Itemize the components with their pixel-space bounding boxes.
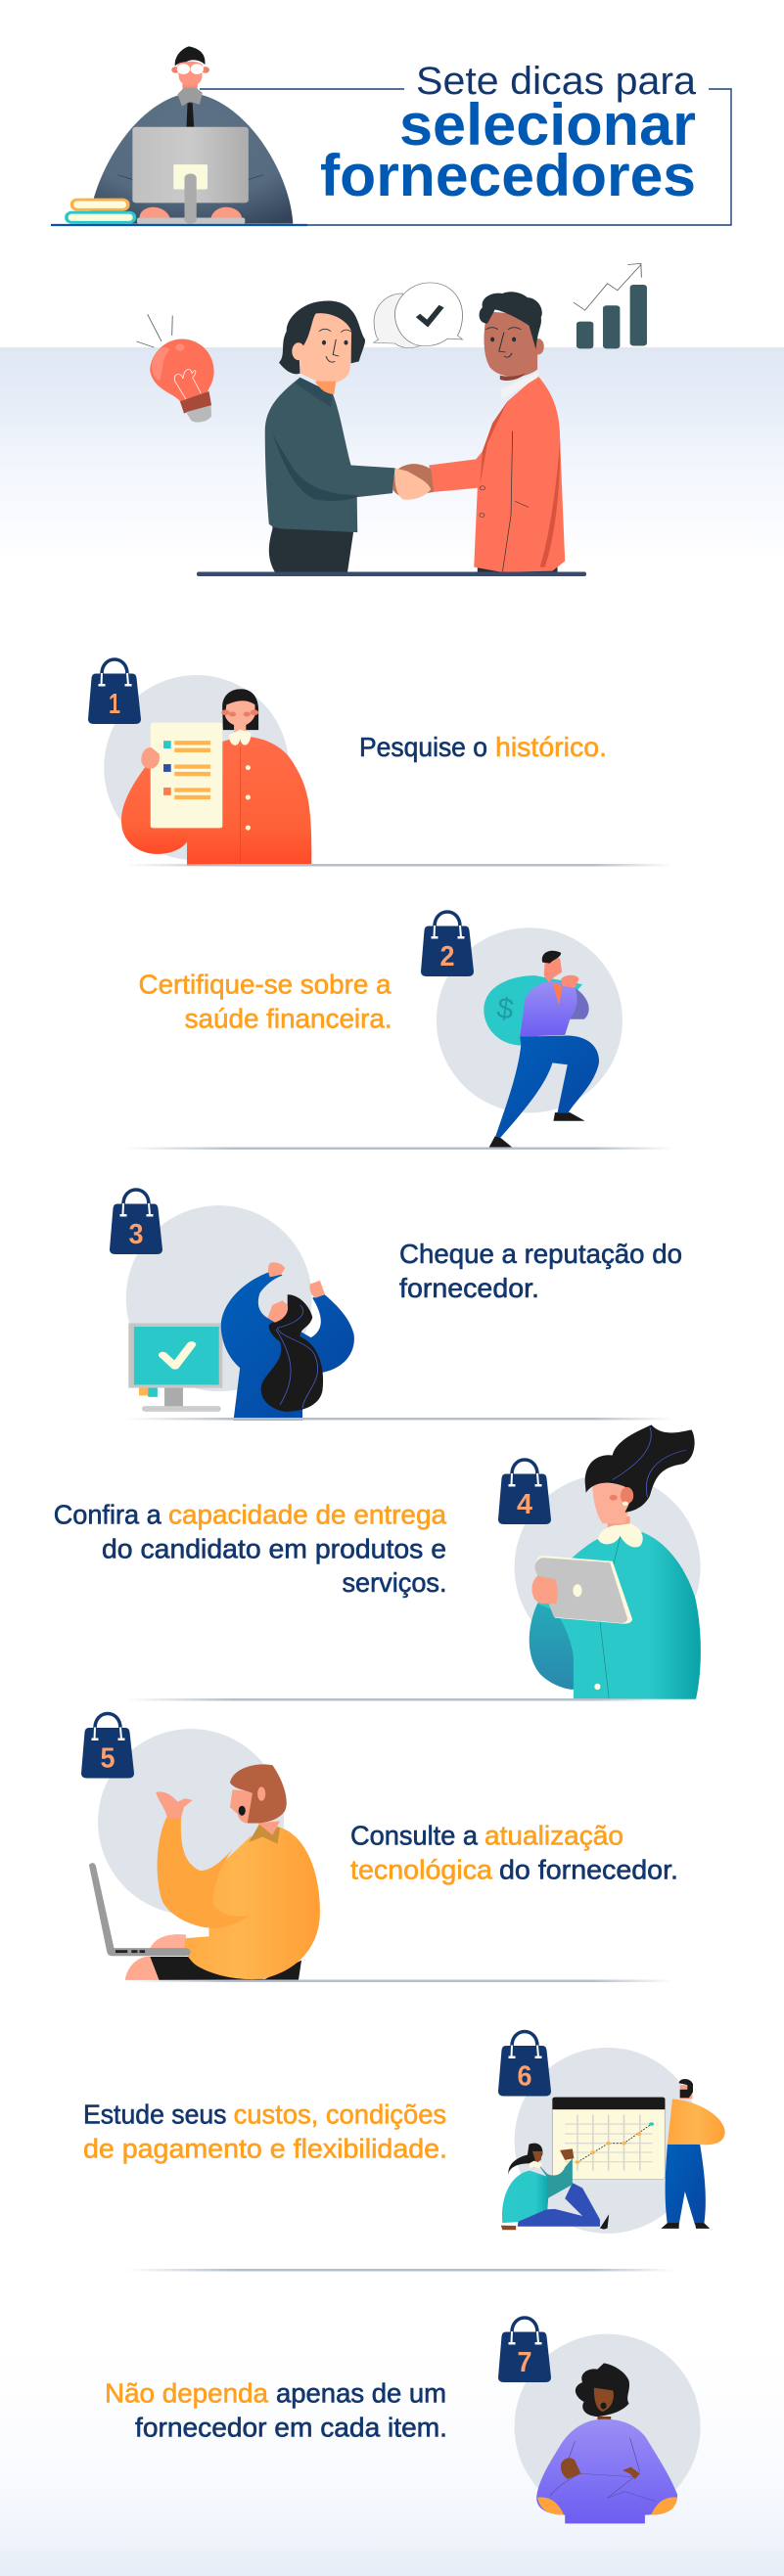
icon: bag number 1: 1 [109,689,120,720]
title: selecionar [399,92,696,158]
title [320,60,697,208]
illustration: two people with chart board [501,2048,725,2234]
text: step 4: serviços. [343,1567,446,1598]
text: step 4: Confira a [54,1499,161,1530]
text: step 5: tecnológica [350,1854,493,1884]
text: step 4 [54,1499,447,1598]
title: fornecedores [320,143,696,208]
header illustration: person at computer [67,46,293,224]
illustration: woman celebrating at monitor [126,1205,354,1421]
background: bottom band [0,2348,784,2576]
icon: light bulb [136,314,214,423]
icon: bag number 7: 7 [517,2347,532,2378]
text: step 2 [139,970,392,1034]
text: step 2: saúde financeira. [185,1004,392,1034]
icon: bag number 2 [421,912,474,976]
text: step 5: atualização [484,1821,623,1851]
text: step 3: fornecedor. [399,1273,539,1303]
icon: speech bubbles with check [374,283,462,348]
text: step 7: Não dependa [105,2378,269,2409]
icon: bag number 4 [498,1460,551,1524]
icon: dollar sign: $ [495,992,516,1026]
text: step 6: custos, condições [234,2100,446,2130]
person right [429,292,565,572]
ground line [197,571,586,576]
illustration: woman holding checklist [104,675,311,866]
person left [265,300,395,572]
icon: rising bar chart [574,263,647,348]
panel: step 7 [105,2318,701,2523]
background: top band [0,347,784,558]
panel: step 6 [83,2031,725,2234]
text: step 4: capacidade de entrega [168,1499,447,1530]
icon: bag number 6 [498,2031,551,2096]
panel: step 5 [81,1714,678,1980]
hands shaking [392,464,434,500]
text: step 6: de pagamento e flexibilidade. [83,2134,447,2164]
text: step 3 [399,1239,682,1303]
title: Sete dicas para [416,60,697,103]
illustration: woman at laptop [89,1729,320,1980]
text: step 1 [359,732,607,762]
text: step 5: do fornecedor. [499,1854,678,1884]
icon: bag number 6: 6 [517,2060,532,2092]
illustration: handshake scene [136,263,647,576]
icon: bag number 4: 4 [517,1489,532,1520]
icon: bag number 3 [110,1190,162,1254]
text: step 6 [83,2100,447,2164]
text: step 7: fornecedor em cada item. [135,2413,447,2443]
text: step 5: Consulte a [350,1821,479,1851]
text: step 7: apenas de um [276,2378,446,2409]
icon: bag number 7 [498,2318,551,2382]
text: step 5 [350,1821,678,1884]
panel: step 4 [54,1424,701,1699]
title box frame [51,89,731,225]
panel: step 2 [139,912,623,1148]
icon: bag number 5: 5 [100,1743,115,1775]
illustration: woman holding tablet [515,1424,701,1699]
icon: bag number 2: 2 [440,941,454,972]
illustration: man carrying money bag [437,927,623,1148]
text: step 1: Pesquise o [359,732,487,762]
text: step 6: Estude seus [83,2100,227,2130]
panel: step 3 [110,1190,682,1421]
text: step 4: do candidato em produtos e [102,1534,446,1563]
illustration: woman with crossed arms [515,2334,701,2523]
text: step 2: Certifique-se sobre a [139,970,392,1000]
icon: bag number 5 [81,1714,134,1779]
text: step 1: histórico. [495,732,607,762]
icon: bag number 1 [88,659,141,724]
text: step 3: Cheque a reputação do [399,1239,682,1269]
text: step 7 [105,2378,447,2443]
panel: step 1 [88,659,607,866]
icon: bag number 3: 3 [129,1219,143,1250]
